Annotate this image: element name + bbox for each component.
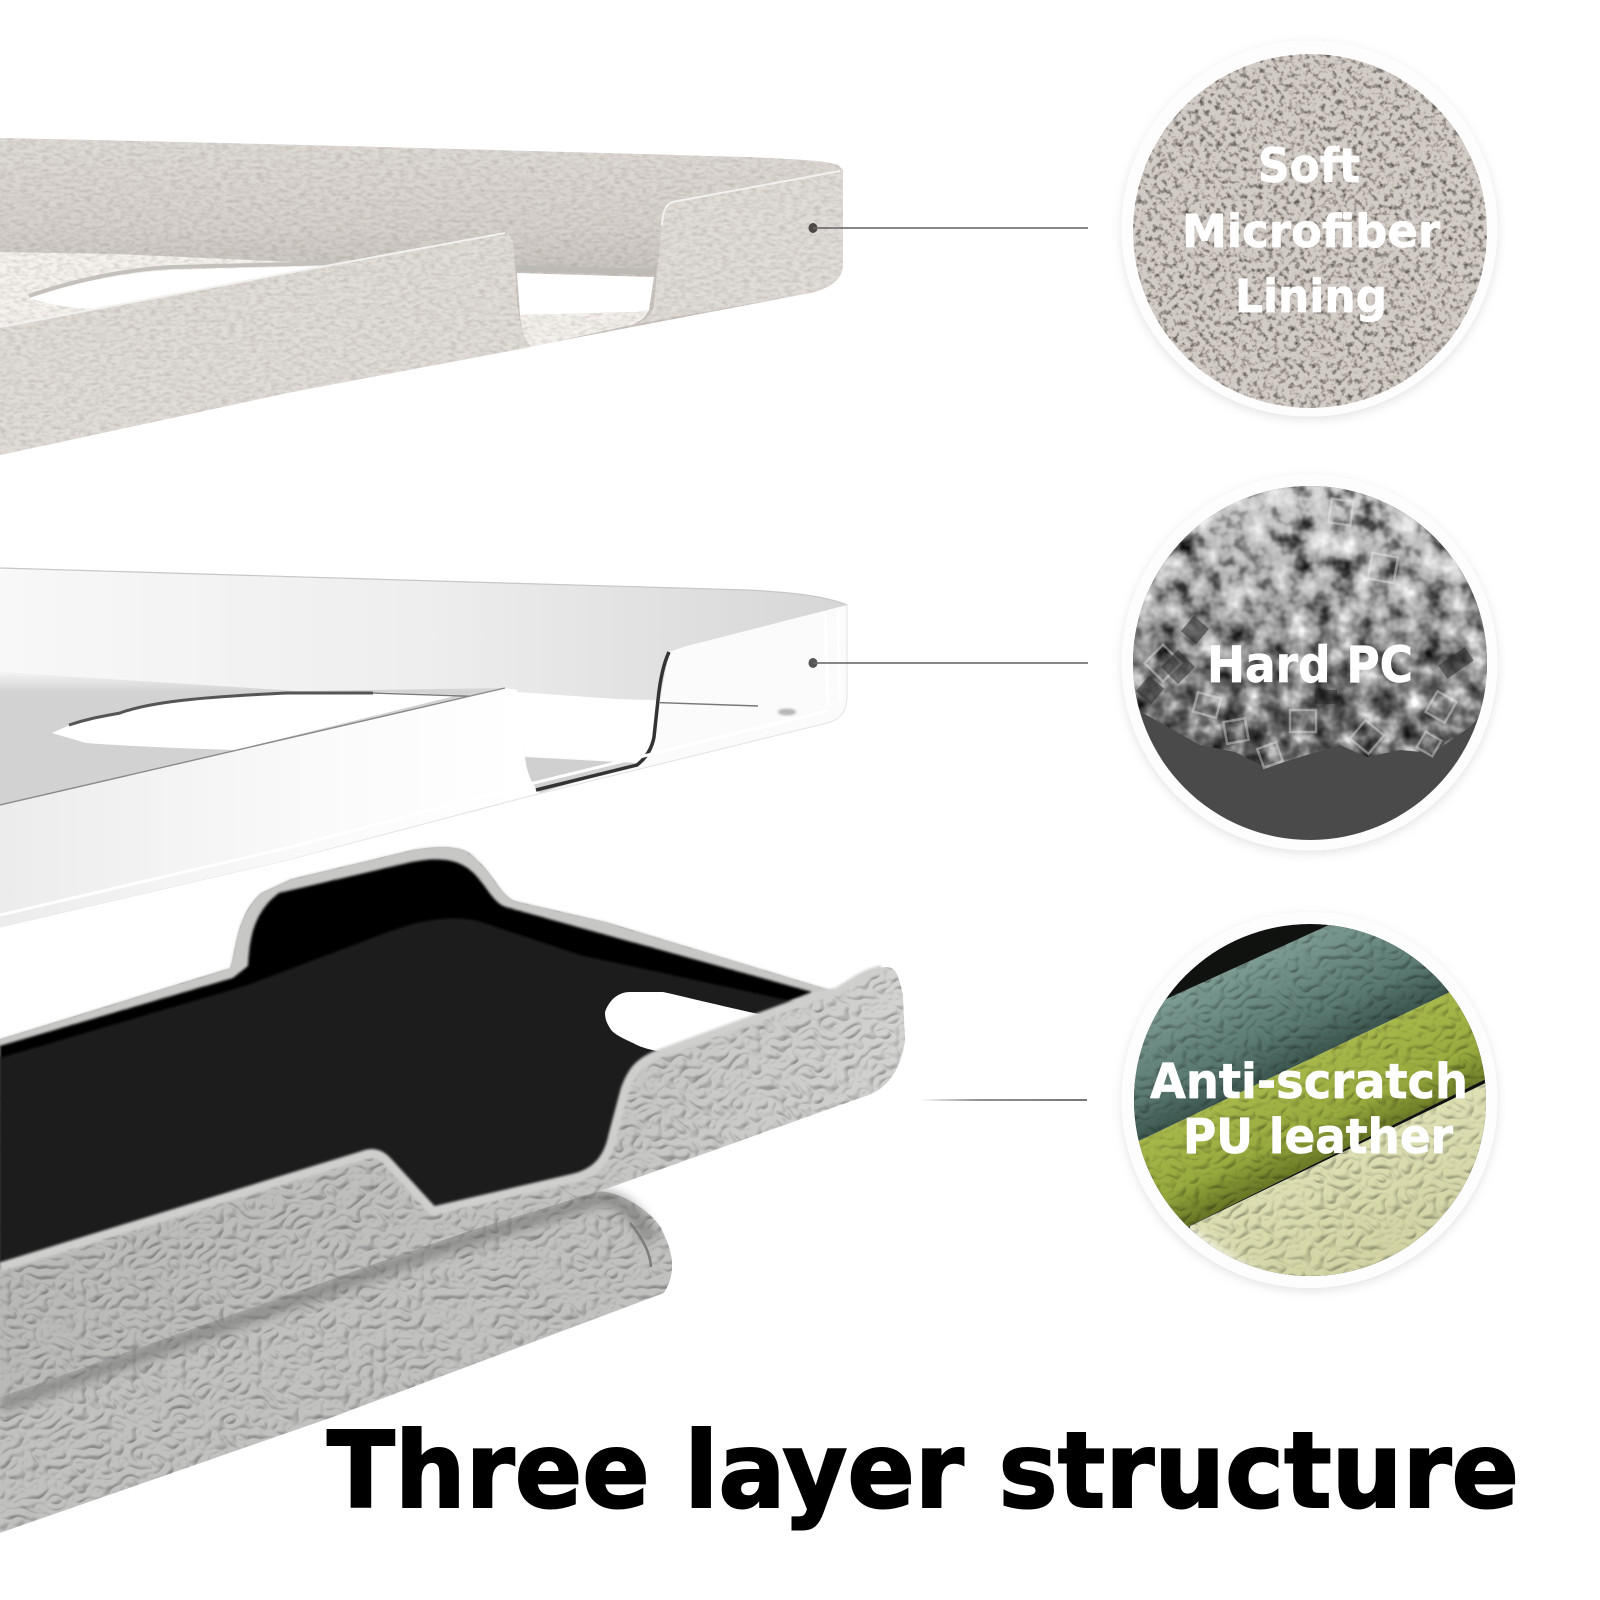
ring <box>1122 474 1498 850</box>
PC pellet swatch <box>1125 480 1495 845</box>
label: Anti-scratch <box>1150 1054 1468 1110</box>
dark pellet gaps <box>1136 616 1474 704</box>
interior floor <box>0 252 339 330</box>
clear silhouette <box>0 568 847 927</box>
side opening <box>517 273 654 315</box>
rim top surface <box>0 847 837 1046</box>
circle: soft microfiber lining <box>1122 40 1498 416</box>
back wall <box>0 138 843 455</box>
pellet pile <box>1125 480 1495 768</box>
side opening floor <box>525 757 637 793</box>
right front wall <box>631 170 843 325</box>
wall top highlights <box>0 171 840 327</box>
top edge line <box>0 568 847 605</box>
callout line: PU leather <box>920 1099 1087 1101</box>
side opening floor <box>520 310 649 347</box>
front wall <box>0 688 537 927</box>
camera cutout <box>29 266 322 309</box>
olive leather roll <box>1138 992 1485 1226</box>
camera hole <box>605 992 763 1052</box>
black backdrop <box>1130 920 1490 1280</box>
label: Microfiber <box>1182 205 1441 258</box>
layer: soft microfiber lining shell <box>0 138 843 455</box>
ring <box>1122 40 1498 416</box>
right end highlights <box>825 610 840 705</box>
callout line: microfiber <box>808 223 1088 233</box>
interior inner wall <box>0 859 812 1267</box>
layer: PU leather folio <box>0 847 905 1533</box>
circle: hard PC <box>1122 474 1498 850</box>
leather swatch <box>1134 924 1486 1276</box>
folio flap <box>0 1191 672 1533</box>
camera hole <box>52 692 459 750</box>
pellet highlights <box>1145 499 1457 768</box>
label: Hard PC <box>1207 636 1413 694</box>
camera hole edge <box>69 693 373 725</box>
floor line <box>373 693 758 706</box>
circle: anti-scratch PU leather <box>1110 912 1500 1295</box>
inner floor <box>0 672 505 805</box>
rim highlight <box>0 970 882 1267</box>
white corner <box>1187 1226 1257 1268</box>
flap shadow under case <box>0 1198 650 1405</box>
inner back wall <box>0 568 847 700</box>
side opening <box>517 692 660 762</box>
side opening edge <box>517 268 656 272</box>
label <box>1150 1054 1468 1165</box>
side opening dark edge <box>536 652 669 790</box>
layer: hard PC shell <box>0 568 847 927</box>
dark surface <box>1130 480 1490 845</box>
interior floor <box>0 918 800 1267</box>
label: PU leather <box>1183 1109 1453 1165</box>
label: Lining <box>1235 270 1387 323</box>
front edge line <box>0 688 505 805</box>
ring <box>1122 912 1498 1288</box>
callout line: hard PC <box>808 658 1088 668</box>
title: Three layer structure <box>327 1410 1519 1532</box>
flap stitch <box>630 1223 651 1267</box>
case outer leather <box>0 847 905 1397</box>
label: Soft <box>1258 139 1360 194</box>
pale leather roll <box>1190 1083 1486 1276</box>
camera cutout edge <box>29 263 338 296</box>
lower rim highlight <box>0 711 827 915</box>
microfiber swatch <box>1133 54 1487 408</box>
label <box>1182 139 1441 323</box>
teal leather roll <box>1134 925 1450 1141</box>
left front wall <box>0 233 531 455</box>
